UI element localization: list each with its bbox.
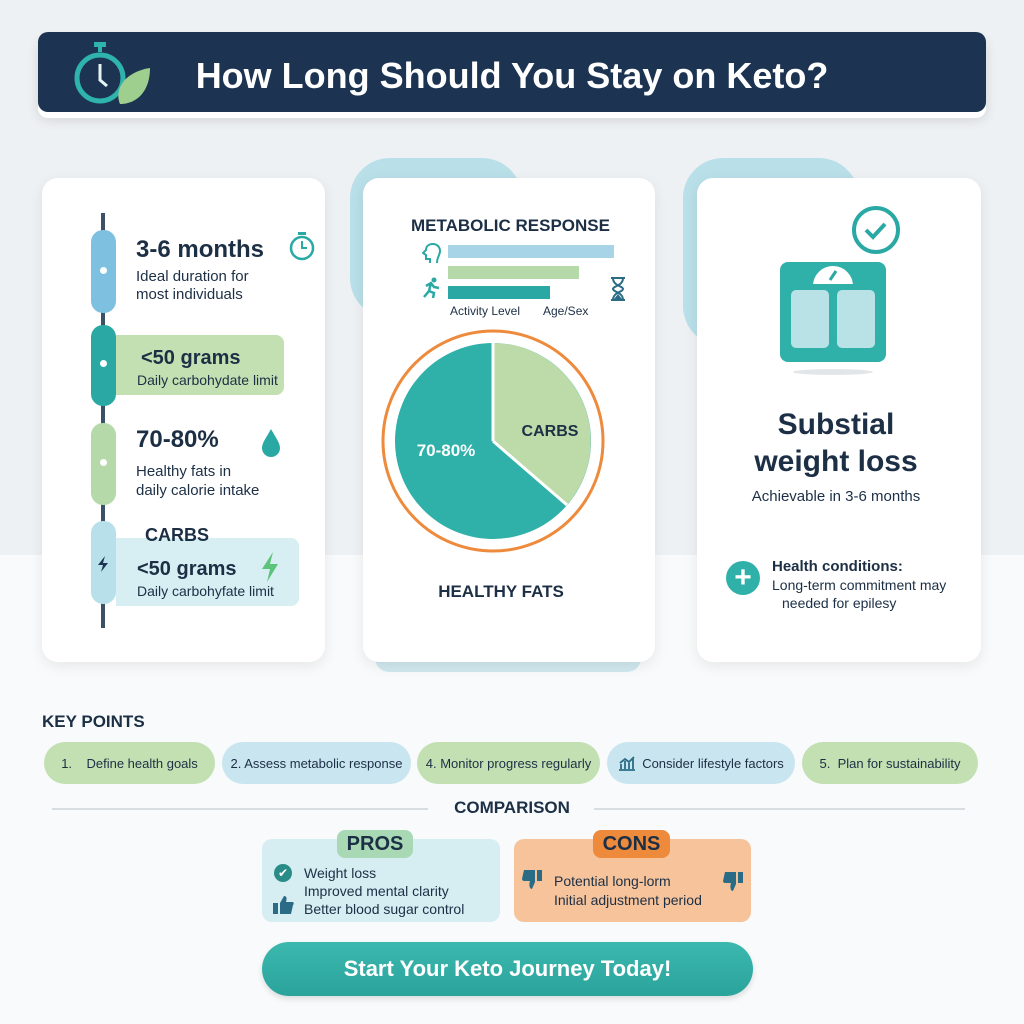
panel: cons: CONS <box>603 833 660 855</box>
text block: carb limit green: <50 grams <box>141 347 241 369</box>
key points pills: 5. Plan for sustainability <box>820 756 960 770</box>
panel: metabolic response: METABOLIC RESPONSE <box>411 216 610 235</box>
text block: carbs box <box>116 538 299 606</box>
text block: substantial weight loss: Achievable in 3-6 months <box>752 488 920 505</box>
text block: substantial weight loss: Substial <box>778 408 894 441</box>
heading: comparison: COMPARISON <box>454 798 570 817</box>
header bar <box>38 32 986 112</box>
text block: 70-80%: daily calorie intake <box>136 482 259 499</box>
panel: pros: Weight loss <box>304 865 376 881</box>
text block: health conditions: Health conditions: <box>772 558 903 575</box>
panel: timeline: Daily carbohyfate limit <box>137 583 274 599</box>
key points pills <box>44 742 978 784</box>
text block: substantial weight loss <box>752 408 920 505</box>
text block: health conditions <box>772 558 946 611</box>
title: How Long Should You Stay on Keto? <box>196 55 828 96</box>
key points pills: 1. Define health goals <box>61 756 198 770</box>
bar chart: Activity Level <box>450 304 520 318</box>
text block: 70-80% <box>136 426 280 499</box>
decorative blobs <box>350 158 522 318</box>
text block: 3-6 months: Ideal duration for <box>136 268 249 285</box>
icon: stopwatch and leaf <box>74 42 150 104</box>
button: call to action: Start Your Keto Journey Today! <box>344 956 671 981</box>
panel: metabolic response <box>363 178 655 662</box>
text block: carb limit green: Daily carbohydate limit <box>137 372 278 388</box>
text block: 70-80%: Healthy fats in <box>136 463 231 480</box>
text block: carb limit green <box>116 335 284 395</box>
panel: pros: Improved mental clarity <box>304 883 449 899</box>
icon: timer <box>290 232 314 260</box>
label: healthy fats: HEALTHY FATS <box>438 582 564 601</box>
panel: timeline: <50 grams <box>137 558 237 580</box>
key points pills: Consider lifestyle factors <box>642 756 784 770</box>
heading: key points: KEY POINTS <box>42 712 145 731</box>
text block: health conditions: Long-term commitment may <box>772 577 946 593</box>
panel: weight loss <box>697 178 981 662</box>
icon: lightning <box>262 552 278 582</box>
button: call to action <box>262 942 753 996</box>
text block: 70-80%: 70-80% <box>136 426 219 453</box>
bar chart <box>422 243 625 318</box>
icon: scale with check <box>780 206 900 375</box>
key points pills: 4. Monitor progress regularly <box>426 756 591 770</box>
panel: pros: PROS <box>347 833 403 855</box>
icon: drop <box>262 429 280 457</box>
text block: 3-6 months: most individuals <box>136 286 243 303</box>
pie chart: CARBS <box>522 423 579 440</box>
pie chart <box>382 330 604 552</box>
bar chart: Age/Sex <box>543 304 588 318</box>
panel: pros: ✔ <box>278 866 288 880</box>
panel: cons <box>514 839 751 922</box>
panel: pros: Better blood sugar control <box>304 901 464 917</box>
icon: plus <box>726 561 760 595</box>
panel: pros <box>262 839 500 922</box>
text block: substantial weight loss: weight loss <box>754 445 918 478</box>
key points pills: 2. Assess metabolic response <box>230 756 402 770</box>
panel: timeline: CARBS <box>145 525 209 545</box>
panel: cons: Initial adjustment period <box>554 892 702 908</box>
text block: health conditions: needed for epilesy <box>782 595 896 611</box>
pie chart: 70-80% <box>417 441 475 460</box>
text block: 3-6 months <box>136 232 314 303</box>
icon: plus: + <box>734 561 752 594</box>
panel: timeline <box>42 178 325 662</box>
text block: 3-6 months: 3-6 months <box>136 236 264 263</box>
panel: cons: Potential long-lorm <box>554 873 671 889</box>
